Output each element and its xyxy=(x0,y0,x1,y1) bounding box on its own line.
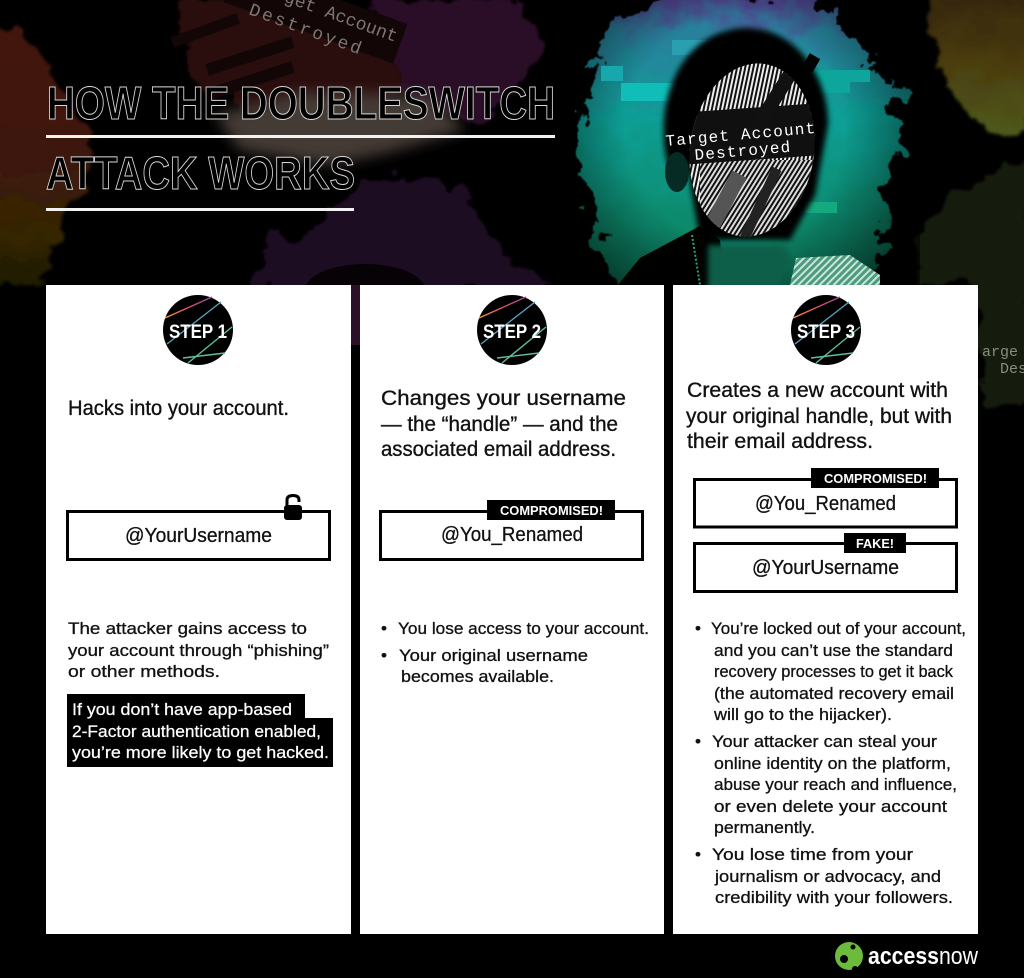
collar xyxy=(790,255,880,285)
hair xyxy=(664,28,828,240)
step 3 bullets: You lose time from your xyxy=(712,845,913,864)
fake username box: FAKE! xyxy=(856,536,894,551)
step 3 bullets: online identity on the platform, xyxy=(714,754,951,773)
callout: two-factor warning xyxy=(67,694,333,767)
step 3 bullets: Your attacker can steal your xyxy=(712,732,937,751)
step 3 bullets: abuse your reach and influence, xyxy=(714,775,957,794)
face text: target account destroyed xyxy=(665,120,816,165)
step 2 heading: associated email address. xyxy=(381,438,616,461)
step 1 description: your account through “phishing” xyxy=(68,641,329,660)
compromised username box: COMPROMISED! xyxy=(824,471,927,486)
step 2 heading: — the “handle” — and the xyxy=(381,413,618,436)
fake username box: @YourUsername xyxy=(752,557,899,579)
username box: @YourUsername xyxy=(125,525,272,547)
callout: two-factor warning: 2-Factor authentication enabled, xyxy=(72,722,321,741)
panel: step 3 xyxy=(673,285,978,934)
upper olive leaf xyxy=(928,0,1024,135)
logo: access now xyxy=(835,942,979,972)
step 3 heading: their email address. xyxy=(687,430,873,453)
step 3 bullets: recovery processes to get it back xyxy=(714,662,953,681)
red and amber paint smudge xyxy=(0,25,95,285)
step 1 heading: Hacks into your account. xyxy=(68,397,289,420)
step 3 bullets xyxy=(695,619,966,907)
step 3 bullets: • xyxy=(695,732,701,751)
step 3 heading: your original handle, but with xyxy=(686,405,952,428)
title line 1: HOW THE DOUBLESWITCH xyxy=(47,77,555,129)
step 3 heading xyxy=(686,379,952,453)
lower olive leaf xyxy=(915,160,1024,412)
step 3 badge xyxy=(791,295,861,365)
step 1 description: or other methods. xyxy=(68,662,220,681)
compromised username box xyxy=(380,500,642,560)
brown paint smudge xyxy=(175,0,420,120)
step 3 bullets: or even delete your account xyxy=(714,797,947,816)
step 3 bullets: • xyxy=(695,619,701,638)
title line 2: ATTACK WORKS xyxy=(46,147,355,199)
logo: access now: accessnow xyxy=(868,943,979,970)
step 2 bullets: You lose access to your account. xyxy=(398,619,649,638)
silhouette of a person xyxy=(618,28,828,285)
teal paint splash xyxy=(545,0,920,300)
step 3 bullets: journalism or advocacy, and xyxy=(714,867,941,886)
title rule 2 xyxy=(46,208,354,211)
step 3 badge: STEP 3 xyxy=(797,322,855,343)
gutter texture xyxy=(351,285,360,345)
faded status text: Destroyed xyxy=(246,1,364,60)
shoulder xyxy=(618,226,725,285)
step 1 badge: STEP 1 xyxy=(169,322,227,343)
callout: two-factor warning: you’re more likely to get hacked. xyxy=(72,743,329,762)
face text: target account destroyed: Destroyed xyxy=(694,139,791,165)
striped face mask xyxy=(690,63,814,237)
faded right text xyxy=(982,344,1024,378)
glitch bars xyxy=(601,40,870,213)
step 2 bullets: • xyxy=(381,619,387,638)
step 2 heading: Changes your username xyxy=(381,387,626,410)
ear xyxy=(665,152,689,192)
callout: two-factor warning: If you don’t have app-based xyxy=(72,700,292,719)
dark stamp with feather shapes xyxy=(170,0,407,101)
step 3 bullets: and you can’t use the standard xyxy=(714,641,953,660)
step 3 bullets: will go to the hijacker). xyxy=(713,705,892,724)
icon: open padlock xyxy=(284,496,302,520)
neck xyxy=(708,245,792,290)
step 2 badge: STEP 2 xyxy=(483,322,541,343)
step 3 heading: Creates a new account with xyxy=(687,379,948,402)
step 2 heading xyxy=(381,387,626,461)
purple paint smudge xyxy=(370,0,540,120)
compromised username box: COMPROMISED! xyxy=(500,503,603,518)
step 1 badge xyxy=(163,295,233,365)
compromised username box: @You_Renamed xyxy=(441,524,583,546)
fake username box xyxy=(694,533,956,592)
rose petals xyxy=(250,172,550,290)
tan halftone smudge xyxy=(215,92,465,165)
compromised username box xyxy=(694,468,956,527)
step 2 bullets: • xyxy=(381,646,387,665)
title rule 1 xyxy=(46,135,555,138)
step 1 description xyxy=(68,619,329,681)
title xyxy=(46,77,555,211)
background collage xyxy=(0,0,1024,412)
step 3 bullets: You’re locked out of your account, xyxy=(711,619,966,638)
icon: green globe xyxy=(835,942,863,972)
step 3 bullets: credibility with your followers. xyxy=(715,888,953,907)
compromised username box: @You_Renamed xyxy=(755,493,896,515)
step 3 bullets: permanently. xyxy=(714,818,815,837)
face text: target account destroyed: Target Account xyxy=(665,120,816,151)
step 3 bullets: • xyxy=(695,845,701,864)
step 2 bullets: Your original username xyxy=(399,646,588,665)
panel: step 2 xyxy=(360,285,664,934)
panel: step 1 xyxy=(46,285,351,934)
step 3 bullets: (the automated recovery email xyxy=(714,684,954,703)
step 2 badge xyxy=(477,295,547,365)
step 2 bullets xyxy=(381,619,649,686)
step 1 description: The attacker gains access to xyxy=(68,619,307,638)
faded right text: arge xyxy=(982,344,1018,361)
earphone cord xyxy=(692,235,700,285)
username box xyxy=(68,512,330,560)
step 2 bullets: becomes available. xyxy=(401,667,554,686)
